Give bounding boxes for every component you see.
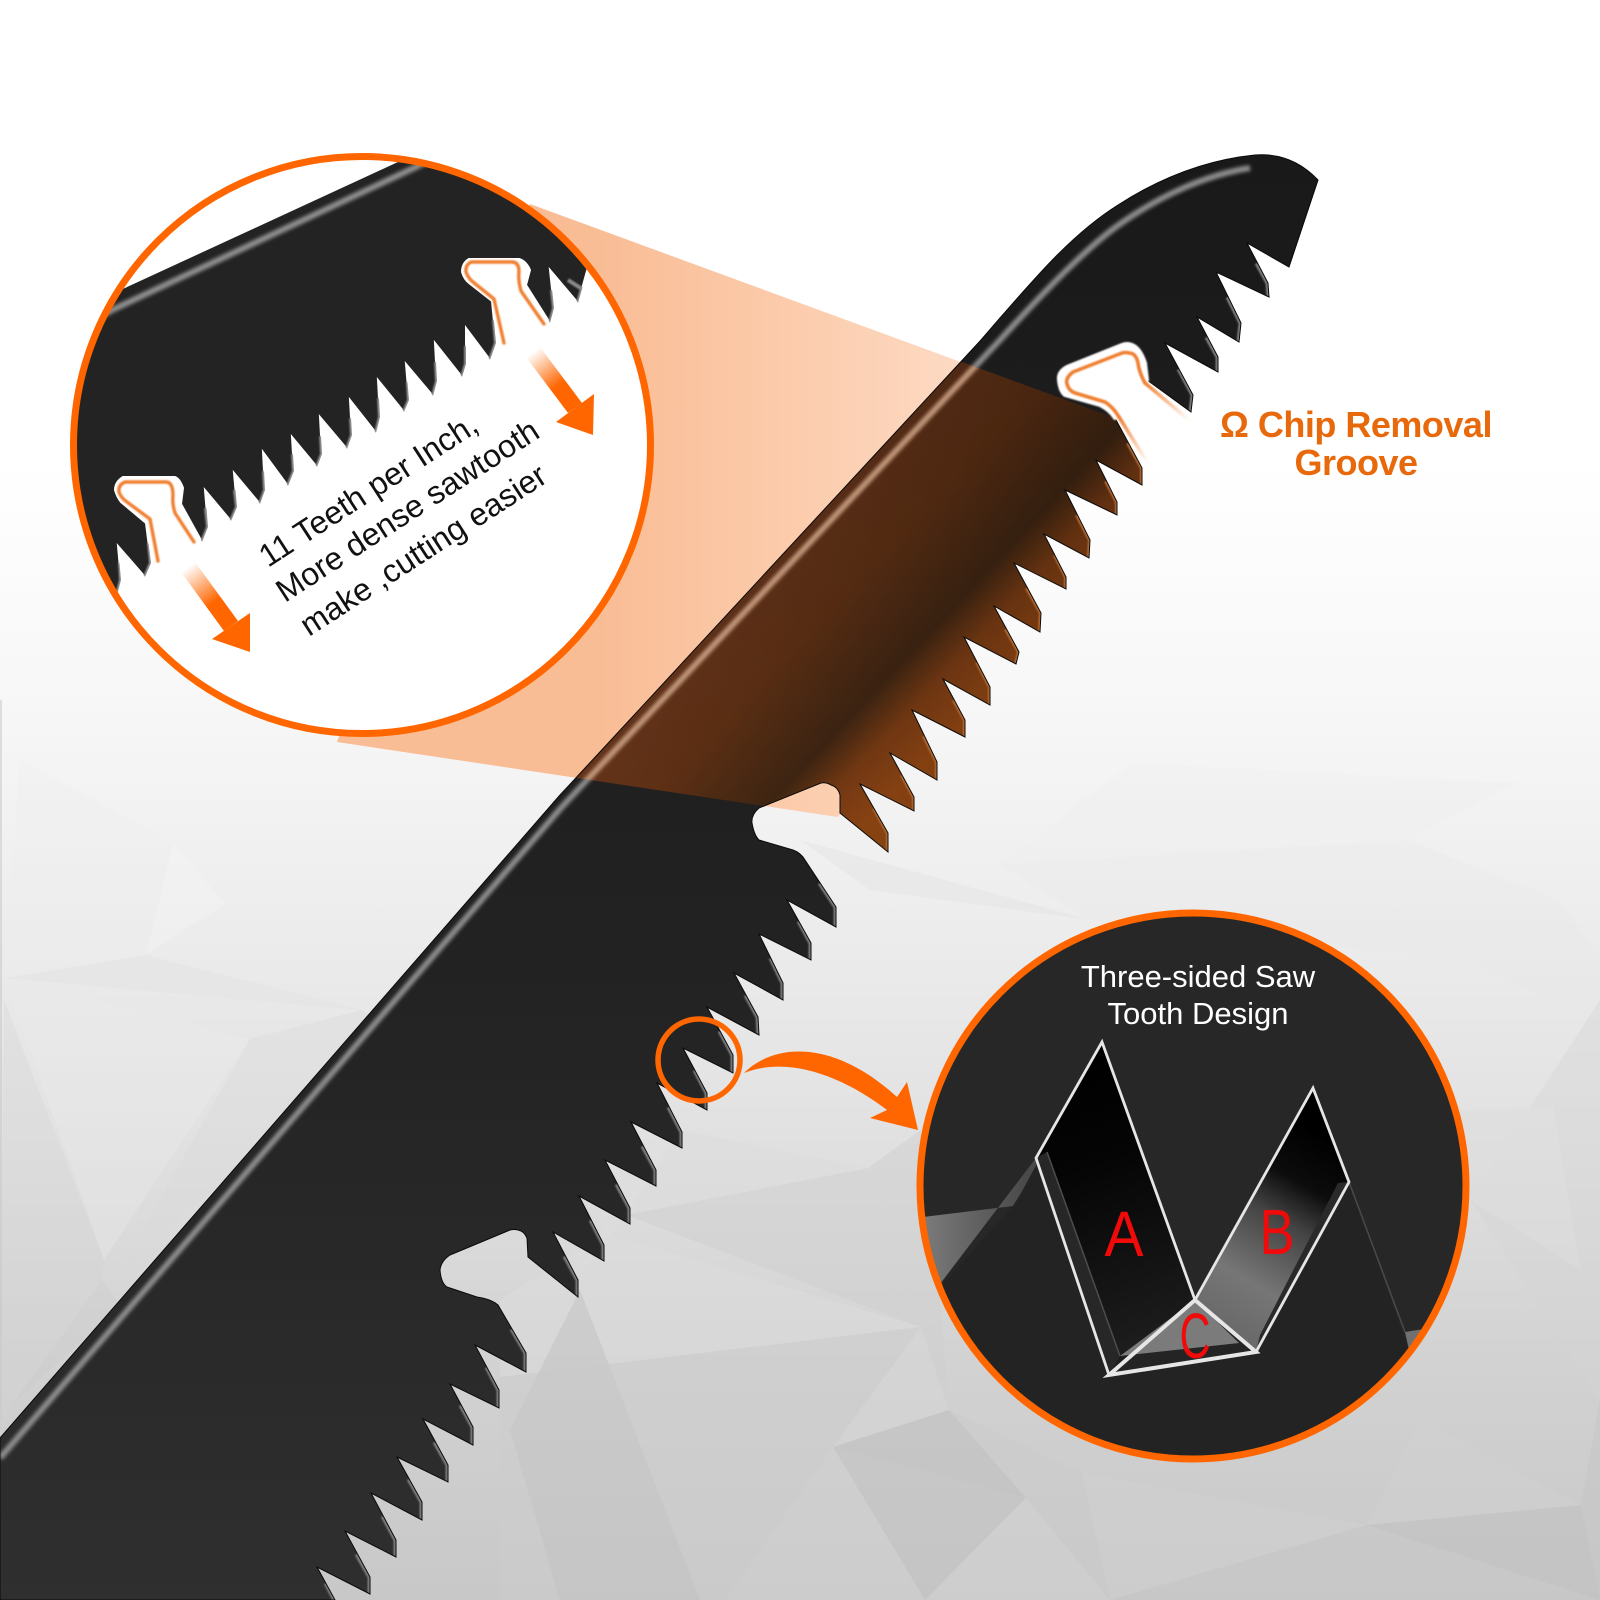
face A	[1036, 1042, 1195, 1375]
inset groove outlines	[119, 262, 544, 561]
inset saw blade	[77, 162, 586, 592]
curved arrow to detail circle	[744, 1051, 918, 1130]
letter labels	[1104, 1196, 1294, 1372]
groove outline on main blade	[1059, 344, 1189, 462]
arrow: chip exit right	[526, 347, 594, 435]
detail circle: three-sided tooth	[916, 910, 1470, 1462]
brown tint on blade inside beam	[576, 362, 1142, 851]
small highlight circle on tooth	[658, 1019, 740, 1101]
label: chip removal groove: Ω Chip Removal	[1220, 404, 1492, 445]
text: 11 teeth per inch: make ,cutting easier	[293, 457, 553, 643]
label: chip removal groove	[1220, 404, 1492, 483]
blade spine highlight	[0, 168, 1250, 1458]
heading: three-sided tooth: Tooth Design	[1108, 996, 1288, 1031]
tooth diagram	[925, 1038, 1421, 1378]
zoom circle: tooth density	[50, 155, 650, 734]
face B	[1195, 1088, 1349, 1352]
text: 11 teeth per inch: 11 Teeth per Inch,	[252, 406, 484, 574]
arrow: chip exit left	[181, 562, 250, 652]
label: chip removal groove: Groove	[1294, 442, 1418, 483]
tooth bevels	[326, 263, 1269, 1600]
letter labels: A	[1104, 1198, 1144, 1270]
text: 11 teeth per inch: More dense sawtooth	[269, 412, 545, 609]
letter labels: B	[1260, 1196, 1294, 1268]
saw blade	[0, 155, 1318, 1600]
outlines	[1036, 1042, 1349, 1375]
letter labels: C	[1180, 1300, 1210, 1372]
heading: three-sided tooth: Three-sided Saw	[1081, 959, 1316, 994]
heading: three-sided tooth	[1081, 959, 1316, 1031]
magnifier beam: peach cone	[337, 204, 1100, 817]
face C	[1120, 1302, 1239, 1356]
